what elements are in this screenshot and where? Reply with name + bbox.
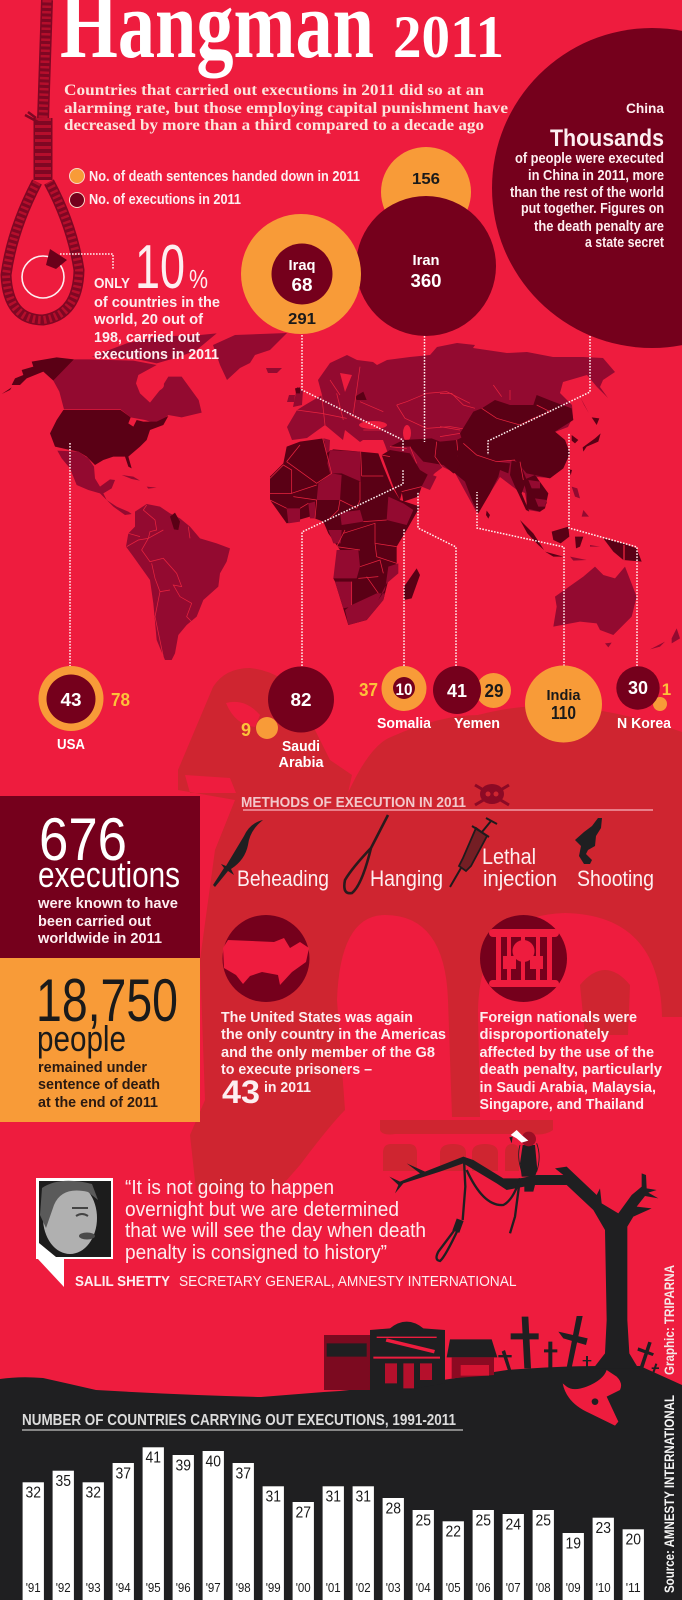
bubble: USA: 43 xyxy=(60,690,82,710)
crosses xyxy=(498,1316,659,1376)
intro text: alarming rate, but those employing capital punishment have xyxy=(64,100,508,117)
asian islands xyxy=(486,417,642,562)
bubble: Yemen xyxy=(433,666,511,732)
legend: No. of death sentences handed down in 2011 xyxy=(89,169,360,185)
panel: 18,750 people: 18,750 xyxy=(36,967,178,1034)
credit: source: Source: AMNESTY INTERNATIONAL xyxy=(661,1395,677,1593)
bar chart: '07 xyxy=(506,1580,521,1595)
panel: 676 executions: 676 xyxy=(39,806,127,873)
bar chart: '95 xyxy=(146,1580,161,1595)
bar chart: 22 xyxy=(445,1524,461,1541)
buildings xyxy=(324,1322,497,1390)
legend xyxy=(70,168,360,208)
panel: China bubble: in China in 2011, more xyxy=(528,167,664,184)
callout: only 10%: of countries in the xyxy=(94,294,220,311)
bar chart: 27 xyxy=(295,1504,311,1521)
bubble: Iran xyxy=(356,147,496,336)
quote: overnight but we are determined xyxy=(125,1199,399,1221)
bar chart: '97 xyxy=(206,1580,221,1595)
bubble: Iran: 156 xyxy=(412,171,440,188)
text: USA note xyxy=(221,1009,446,1110)
icon: prison bars circle xyxy=(480,915,567,1002)
text: foreign nationals note: Singapore, and Thailand xyxy=(480,1096,644,1113)
bubble: Yemen: Yemen xyxy=(454,715,500,732)
panel: 676 executions: were known to have xyxy=(37,895,178,912)
bubble: USA: 78 xyxy=(111,690,130,710)
bubble: Saudi Arabia: 82 xyxy=(290,690,312,710)
title: 2011 xyxy=(393,4,504,70)
middle east xyxy=(382,450,428,500)
panel: China bubble: the death penalty are xyxy=(534,218,664,235)
bar chart xyxy=(23,1447,644,1600)
bar chart: '01 xyxy=(326,1580,341,1595)
quote attribution: SECRETARY GENERAL, AMNESTY INTERNATIONAL xyxy=(179,1273,516,1290)
method: shooting: Shooting xyxy=(577,866,654,891)
callout: only 10%: executions in 2011 xyxy=(94,346,219,363)
bar chart: '06 xyxy=(476,1580,491,1595)
text: foreign nationals note: disproportionately xyxy=(480,1026,610,1043)
callout: only 10%: 198, carried out xyxy=(94,329,200,346)
method: lethal injection: injection xyxy=(483,866,557,891)
bar chart: '09 xyxy=(566,1580,581,1595)
text: USA note: The United States was again xyxy=(221,1009,413,1026)
panel: 676 executions: been carried out xyxy=(38,913,151,930)
intro text: decreased by more than a third compared to a decade ago xyxy=(64,117,484,134)
callout: only 10%: % xyxy=(189,264,208,294)
panel: 676 executions: worldwide in 2011 xyxy=(37,930,162,947)
greenland and iceland xyxy=(213,333,287,380)
tree xyxy=(389,1157,658,1368)
bar chart: '03 xyxy=(386,1580,401,1595)
bar chart: 32 xyxy=(25,1485,41,1502)
bar chart: '99 xyxy=(266,1580,281,1595)
bar chart: 31 xyxy=(325,1489,341,1506)
bull skull xyxy=(563,1370,621,1426)
bubble: Yemen: 29 xyxy=(484,681,504,701)
bar chart: '05 xyxy=(446,1580,461,1595)
callout: only 10% xyxy=(93,233,220,363)
bubble: Iraq: 68 xyxy=(292,275,312,295)
intro text xyxy=(64,82,508,134)
bar chart: 25 xyxy=(475,1512,491,1529)
text: USA note: the only country in the Americas xyxy=(221,1026,446,1043)
bubble: Saudi Arabia: Arabia xyxy=(278,754,324,771)
bar chart: '94 xyxy=(116,1580,131,1595)
icon: USA circle xyxy=(222,915,310,1002)
bar chart: '00 xyxy=(296,1580,311,1595)
europe and central asia borders xyxy=(295,367,470,430)
bubble: Iraq: Iraq xyxy=(288,257,316,274)
africa xyxy=(270,433,480,625)
leader lines xyxy=(70,335,637,666)
ground xyxy=(0,1366,682,1600)
eurasia xyxy=(287,343,615,513)
text: USA note: 43 xyxy=(222,1074,260,1110)
bubble: India xyxy=(525,666,602,742)
panel: China bubble: China xyxy=(626,100,664,116)
quote xyxy=(125,1177,426,1264)
bubble: Iran: Iran xyxy=(412,252,440,269)
hanging rope xyxy=(437,1160,520,1261)
panel: 676 executions: executions xyxy=(38,854,180,895)
bubble: Yemen: 41 xyxy=(447,681,467,701)
text: foreign nationals note xyxy=(480,1009,663,1113)
bar chart: 28 xyxy=(385,1500,401,1517)
bar chart: 25 xyxy=(535,1512,551,1529)
bar chart: '93 xyxy=(86,1580,101,1595)
bar chart: 31 xyxy=(355,1489,371,1506)
text: foreign nationals note: Foreign nationals were xyxy=(480,1009,637,1026)
graveyard town and tree xyxy=(324,1130,659,1426)
bubble: Somalia: Somalia xyxy=(377,715,432,732)
callout: only 10%: 10 xyxy=(135,233,185,302)
world map xyxy=(2,333,680,660)
bar chart: 19 xyxy=(565,1535,581,1552)
bar chart: 39 xyxy=(175,1457,191,1474)
method: beheading: Beheading xyxy=(237,866,329,891)
noose illustration xyxy=(6,0,79,320)
text: foreign nationals note: death penalty, particularly xyxy=(480,1061,663,1078)
bubble: Iraq xyxy=(241,214,361,334)
bar chart: '10 xyxy=(596,1580,611,1595)
callout: only 10%: world, 20 out of xyxy=(93,311,204,328)
bubble: Somalia: 37 xyxy=(359,680,378,700)
bar chart: 20 xyxy=(625,1532,641,1549)
bar chart: '91 xyxy=(26,1580,41,1595)
south and east asia xyxy=(440,385,680,649)
bubble: Iran: 360 xyxy=(410,271,442,291)
bar chart: '08 xyxy=(536,1580,551,1595)
bar chart: '04 xyxy=(416,1580,431,1595)
method: hanging xyxy=(344,815,443,893)
bubble: N Korea: 30 xyxy=(628,678,648,698)
bar chart: 25 xyxy=(415,1512,431,1529)
panel: 676 executions xyxy=(0,796,200,958)
bar chart: '11 xyxy=(626,1580,641,1595)
australia and new zealand xyxy=(553,567,637,647)
bar chart: 32 xyxy=(85,1485,101,1502)
bar chart: 41 xyxy=(145,1450,161,1467)
bubble: N Korea: 1 xyxy=(662,680,671,699)
bar chart: 31 xyxy=(265,1489,281,1506)
vulture xyxy=(520,1145,537,1177)
icon: skull and crossbones xyxy=(475,784,509,805)
text: USA note: in 2011 xyxy=(264,1079,311,1096)
panel: 18,750 people: remained under xyxy=(38,1059,147,1076)
text: USA note: and the only member of the G8 xyxy=(221,1044,435,1061)
method: hanging: Hanging xyxy=(370,866,443,891)
panel: China bubble: a state secret xyxy=(585,234,664,251)
method: lethal injection: Lethal xyxy=(482,844,536,869)
panel: 18,750 people: at the end of 2011 xyxy=(38,1094,158,1111)
callout: only 10%: ONLY xyxy=(94,275,130,292)
bubble: N Korea: N Korea xyxy=(617,715,672,732)
bubble: Iraq: 291 xyxy=(288,311,316,328)
bubble: USA xyxy=(38,666,130,753)
quote: penalty is consigned to history” xyxy=(125,1242,387,1264)
bubble: USA: USA xyxy=(57,736,85,753)
text: foreign nationals note: affected by the use of the xyxy=(480,1044,654,1061)
bar chart: 40 xyxy=(205,1453,221,1470)
panel: China bubble xyxy=(492,28,682,348)
bar chart: 23 xyxy=(595,1520,611,1537)
quote: that we will see the day when death xyxy=(125,1220,426,1242)
bubble: Somalia xyxy=(359,666,432,732)
bar chart: 37 xyxy=(115,1465,131,1482)
portrait of Salil Shetty xyxy=(36,1178,113,1287)
bubble: Saudi Arabia xyxy=(241,666,334,771)
text: foreign nationals note: in Saudi Arabia, Malaysia, xyxy=(480,1079,656,1096)
panel: 18,750 people: sentence of death xyxy=(38,1076,160,1093)
bubble: India: 110 xyxy=(551,703,576,723)
bar chart: 24 xyxy=(505,1516,521,1533)
bar chart: '92 xyxy=(56,1580,71,1595)
legend: No. of executions in 2011 xyxy=(89,192,241,208)
bubble: N Korea xyxy=(616,666,672,732)
method: lethal injection xyxy=(450,818,557,891)
panel: 18,750 people xyxy=(0,958,200,1122)
bar chart: '02 xyxy=(356,1580,371,1595)
ten percent pie icon xyxy=(22,249,113,298)
bubble: Saudi Arabia: 9 xyxy=(241,720,251,740)
heading: methods of execution: METHODS OF EXECUTION IN 2011 xyxy=(241,794,466,811)
bar chart: '96 xyxy=(176,1580,191,1595)
chart title: NUMBER OF COUNTRIES CARRYING OUT EXECUTIONS, 1991-2011 xyxy=(22,1412,456,1429)
method: beheading xyxy=(213,820,329,891)
panel: 18,750 people: people xyxy=(37,1018,126,1059)
quote: “It is not going to happen xyxy=(125,1177,334,1199)
bubble: Somalia: 10 xyxy=(396,680,412,699)
text: USA note: to execute prisoners – xyxy=(221,1061,372,1078)
intro text: Countries that carried out executions in 2011 did so at an xyxy=(64,82,484,99)
americas xyxy=(2,333,230,660)
bubble: India: India xyxy=(546,687,581,704)
background skull silhouette xyxy=(178,668,682,1190)
method: shooting xyxy=(575,818,654,891)
bubble: Saudi Arabia: Saudi xyxy=(282,738,320,755)
credit: graphic: Graphic: TRIPARNA xyxy=(661,1265,677,1375)
bar chart: '98 xyxy=(236,1580,251,1595)
bar chart: 35 xyxy=(55,1473,71,1490)
quote attribution: SALIL SHETTY xyxy=(75,1273,170,1290)
panel: China bubble: Thousands xyxy=(550,125,664,152)
bar chart: 37 xyxy=(235,1465,251,1482)
